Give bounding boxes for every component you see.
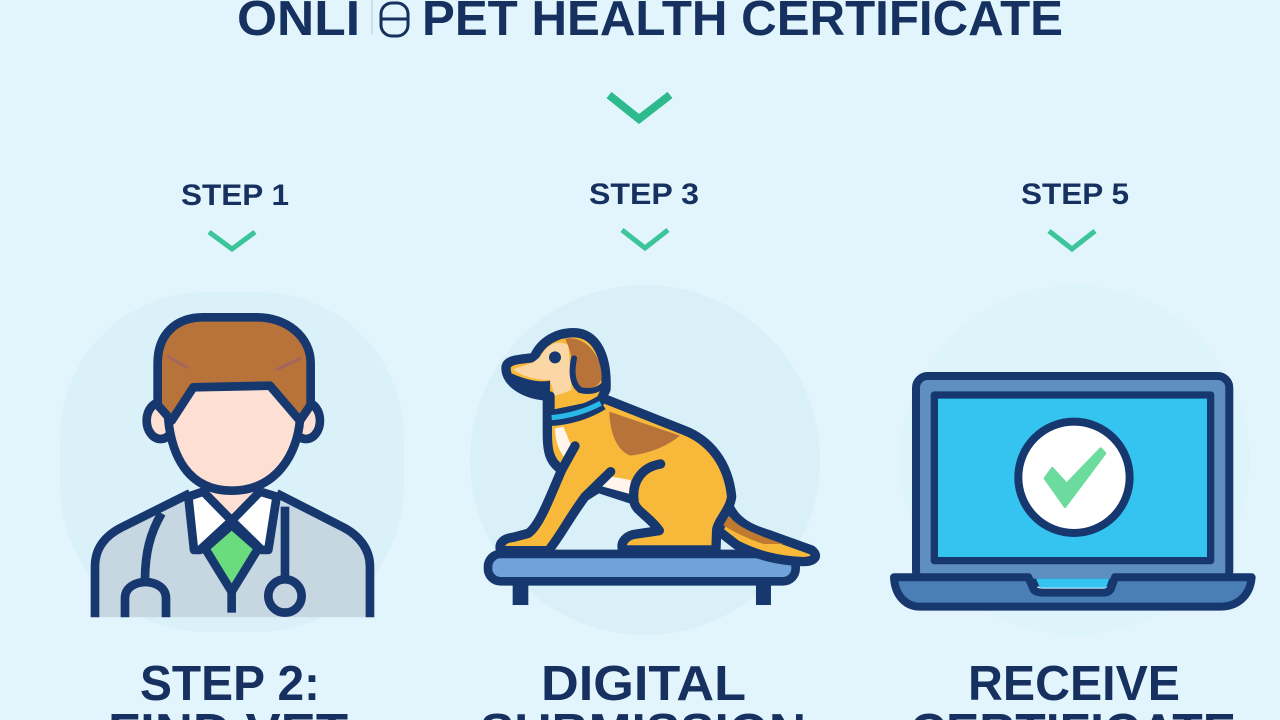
dog collar band xyxy=(550,403,602,418)
check badge xyxy=(1018,422,1130,533)
dog collar highlight xyxy=(552,403,601,418)
dog leg lines xyxy=(562,446,661,500)
stethoscope xyxy=(125,507,302,617)
vet hair xyxy=(158,317,311,421)
step label 1: STEP 1 xyxy=(181,179,289,212)
dog body xyxy=(500,398,732,551)
exam table top xyxy=(488,554,796,581)
icon: veterinarian xyxy=(60,292,404,632)
vet ears xyxy=(147,402,320,439)
vet tie xyxy=(205,525,258,592)
dog tail shading xyxy=(723,513,783,544)
vet face xyxy=(168,385,300,491)
vet coat xyxy=(95,500,370,617)
laptop lid xyxy=(916,376,1229,583)
dog ear xyxy=(565,338,602,389)
exam table legs xyxy=(513,583,771,605)
laptop screen xyxy=(934,395,1211,561)
check mark xyxy=(1045,449,1105,507)
arrow: step 5 chevron xyxy=(1049,231,1095,249)
icon: dog on exam table xyxy=(470,285,820,635)
dog face xyxy=(513,343,572,396)
dog eye xyxy=(549,351,561,363)
lapel line xyxy=(219,592,245,613)
heading: find vet xyxy=(108,657,348,720)
hair highlights xyxy=(167,356,301,370)
arrow: main chevron xyxy=(609,95,670,119)
arrow: step 3 chevron xyxy=(622,230,668,248)
dog jaw xyxy=(512,373,550,395)
step label 3: STEP 3 xyxy=(589,178,699,211)
neck xyxy=(205,487,258,520)
dog head xyxy=(506,333,606,415)
heading: receive certificate xyxy=(910,657,1236,720)
coat outline xyxy=(95,493,370,617)
arrow: step 1 chevron xyxy=(209,232,255,249)
heading: digital submission xyxy=(480,657,806,720)
step label 5: STEP 5 xyxy=(1021,178,1129,211)
vet collar xyxy=(188,492,277,550)
heading: digital submission: DIGITAL xyxy=(541,657,746,711)
dog ear line xyxy=(573,358,606,391)
icon: laptop with check xyxy=(894,285,1252,635)
dog tail xyxy=(718,507,815,562)
heading: receive certificate: RECEIVE xyxy=(968,657,1180,711)
laptop notch xyxy=(1036,579,1109,588)
laptop base xyxy=(894,577,1252,607)
heading: find vet: STEP 2: xyxy=(140,657,320,711)
dog saddle patch xyxy=(609,412,680,456)
dog chest patches xyxy=(555,427,631,494)
